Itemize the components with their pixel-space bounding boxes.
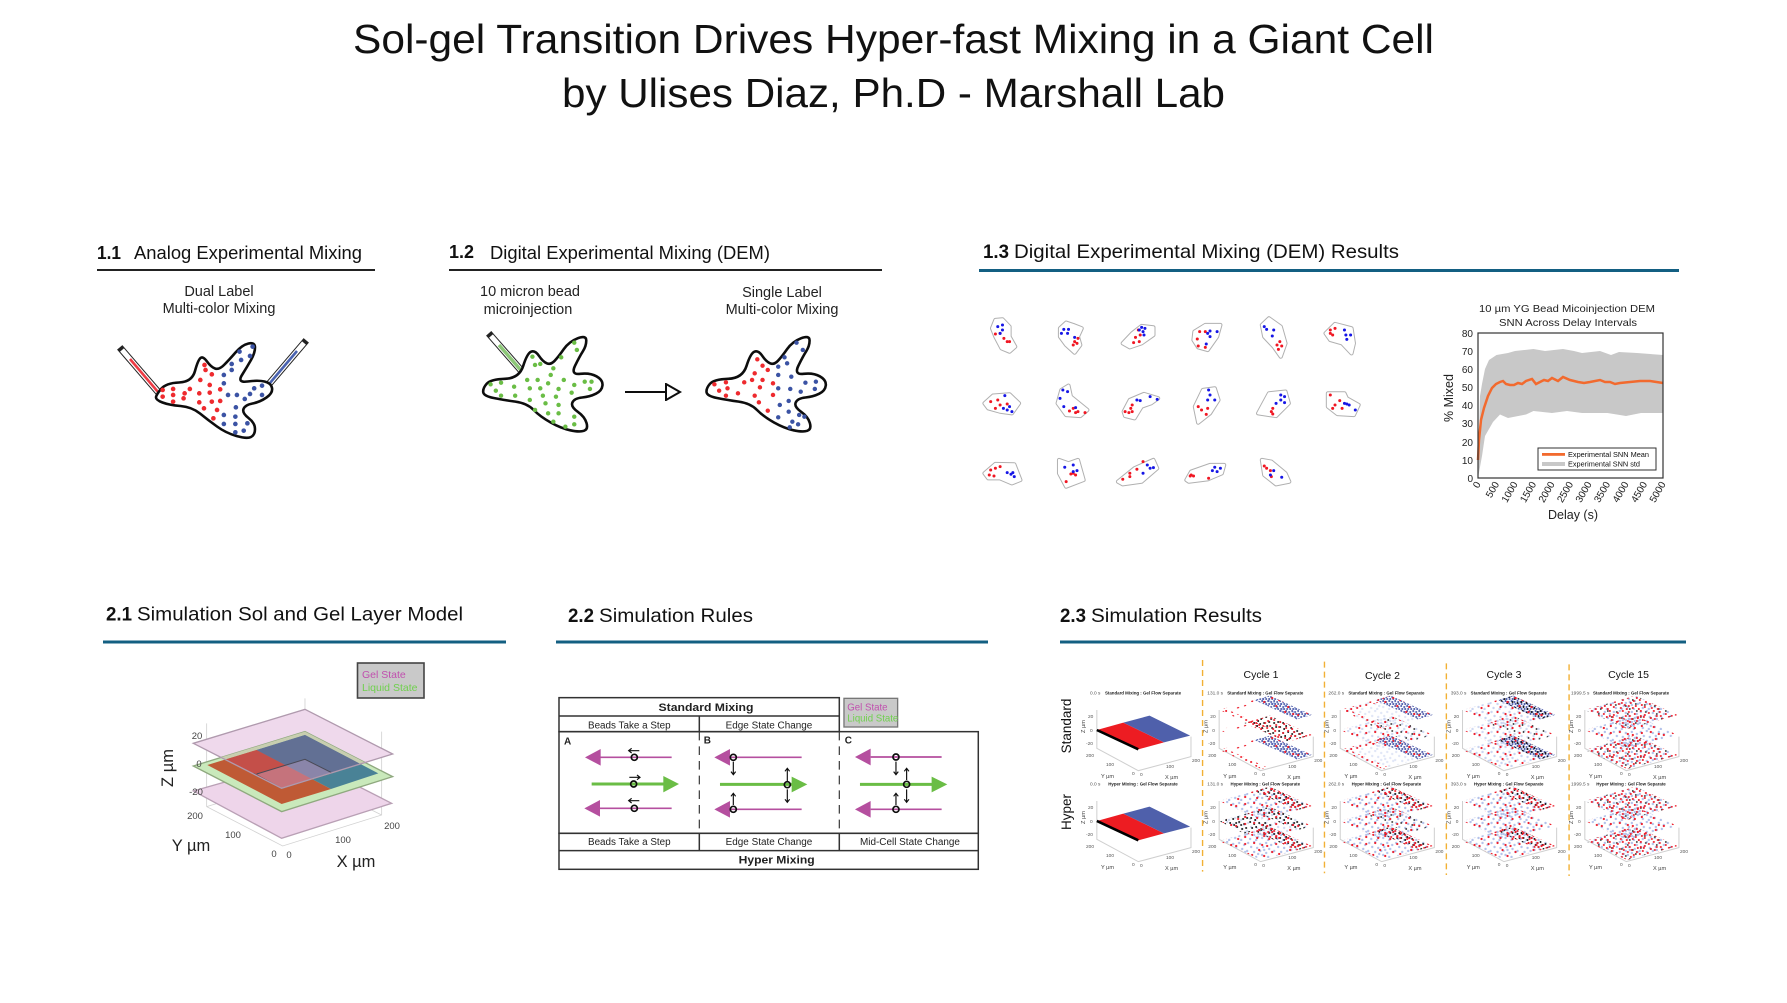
table labels: Hyper Mixing [739,855,815,867]
panel annotations: hyper row: 0 [1628,863,1631,869]
panel annotations: hyper row: 0 [1140,863,1143,869]
dashed cycle dividers [1203,660,1569,876]
panel annotations: standard row: X µm [1165,775,1179,781]
panel annotations: standard row: -20 [1329,741,1337,747]
text: single label multi-color mixing: Multi-color Mixing [726,302,838,318]
legend: Experimental SNN std [1568,460,1640,468]
axis tick labels [187,731,400,861]
chart: percent mixed across delay intervals [1442,303,1669,522]
panel annotations: hyper row: 200 [1192,849,1200,855]
panel annotations: hyper row: 0.0 s [1090,782,1101,788]
panel: 1.1 analog experimental mixing [97,242,375,438]
text: dual label multi-color mixing: Dual Label [184,284,254,300]
panel annotations: standard row: 100 [1472,762,1480,768]
panel annotations: standard row: 200 [1680,758,1688,764]
panel annotations: hyper row: 0 [1456,819,1459,825]
table labels: Edge State Change [726,720,813,731]
x axis labels: 1500 [1518,480,1539,505]
table labels: Standard Mixing [658,702,753,714]
panel annotations: standard row: 0 [1090,728,1093,734]
heading 2.3 [1060,605,1686,644]
cell tracks grid [985,318,1359,487]
y axis labels: 40 [1462,401,1473,412]
x axis labels: 4500 [1629,480,1650,505]
3D layer plot [159,698,400,871]
panel annotations: hyper row: 100 [1594,853,1602,859]
legend: gel and liquid state: Liquid State [362,682,418,694]
panel: standard cycle 15 [1585,696,1679,771]
panel annotations: standard row: -20 [1086,741,1093,747]
panel annotations: hyper row: 200 [1435,849,1444,855]
heading 1.3: Digital Experimental Mixing (DEM) Results [1014,241,1399,263]
axis tick labels: 0 [286,850,292,861]
x axis labels: 4000 [1611,480,1632,505]
panel annotations: hyper row: Hyper Mixing : Gel Flow Separate [1596,782,1666,786]
cycle labels: Cycle 15 [1608,669,1649,681]
panel annotations: standard row: Z µm [1569,720,1575,733]
legend: gel and liquid state: Liquid State [847,713,898,724]
panel annotations: standard row: 393.0 s [1451,690,1467,696]
panel annotations: standard row: 200 [1574,753,1582,759]
panel annotations: hyper row: 100 [1532,855,1540,861]
panel annotations: hyper row: -20 [1452,832,1459,838]
heading 1.1: Analog Experimental Mixing [134,242,362,263]
panel: hyper cycle 15 [1585,787,1679,862]
panel annotations: standard row: X µm [1287,775,1301,781]
panel annotations: standard row: 100 [1166,764,1174,770]
panel annotations: standard row: 0 [1132,771,1135,777]
text: dual label multi-color mixing: Multi-color Mixing [163,301,275,317]
panel annotations: hyper row: 1999.5 s [1571,782,1590,788]
panel annotations: standard row: 100 [1532,764,1540,770]
y axis labels: 20 [1462,438,1473,449]
axis tick labels: -20 [189,787,203,798]
axis tick labels: 100 [335,835,351,846]
panel annotations: hyper row: -20 [1086,832,1093,838]
panel: hyper initial [1097,801,1191,862]
panel annotations: standard row: Standard Mixing : Gel Flow Separate [1105,690,1182,696]
chart title: SNN Across Delay Intervals [1499,317,1637,329]
cycle labels: Cycle 3 [1486,669,1522,681]
panel annotations: standard row: 0 [1254,771,1257,777]
panel: hyper cycle 2 [1340,787,1434,862]
table labels: C [845,736,852,747]
panel annotations: standard row: Y µm [1344,774,1358,780]
heading 1.3: 1.3 [983,241,1009,263]
text: dual label multi-color mixing [163,284,275,317]
panel annotations: hyper row: 0 [1262,863,1265,869]
panel annotations: standard row: 0.0 s [1090,690,1101,696]
panel annotations: standard row: Standard Mixing : Gel Flow Separate [1227,690,1304,696]
panel annotations: standard row: 200 [1314,758,1323,764]
axis titles: Y µm [172,837,210,855]
panel annotations: standard row: -20 [1208,741,1216,747]
panel annotations: hyper row: Y µm [1589,865,1602,871]
x axis labels: 2500 [1555,480,1576,505]
axis tick labels: 0 [196,759,202,770]
row labels: Hyper [1059,793,1074,830]
panel annotations: hyper row: 200 [1329,844,1338,850]
legend: gel and liquid state [358,663,424,698]
panel annotations: hyper row: 20 [1454,805,1459,811]
panel annotations: hyper row: Y µm [1344,865,1358,871]
legend: Experimental SNN Mean [1568,450,1649,459]
axis titles [159,749,375,871]
panel annotations: standard row: 262.0 s [1328,690,1345,696]
panel annotations: standard row: 0 [1578,728,1581,734]
panel annotations: hyper row: 0 [1090,819,1093,825]
legend: gel and liquid state [844,698,898,727]
heading 1.2: Digital Experimental Mixing (DEM) [490,242,770,263]
panel annotations: standard row: 1999.5 s [1571,690,1590,696]
title [353,16,1434,116]
panel annotations: hyper row: 200 [1314,849,1323,855]
panel annotations: hyper row: 0 [1383,863,1386,869]
x axis labels: 500 [1484,480,1502,500]
table labels: A [564,736,571,747]
panel annotations: hyper row: 200 [1208,844,1217,850]
panel annotations: hyper row: 100 [1106,853,1114,859]
panel annotations: hyper row: Z µm [1081,811,1087,824]
axis titles: X µm [337,853,375,871]
panel annotations: hyper row: 0 [1212,819,1215,825]
y axis labels: 60 [1462,365,1473,376]
panel annotations: hyper row: Hyper Mixing : Gel Flow Separate [1108,782,1178,786]
panel: 2.2 simulation rules [556,605,988,869]
panel annotations: standard row: 200 [1208,753,1217,759]
panel annotations: hyper row: 20 [1576,805,1582,811]
x axis title: Delay (s) [1548,508,1598,522]
axis titles: Z µm [159,749,177,787]
chart title [1479,303,1655,329]
panel annotations: standard row: 200 [1192,758,1200,764]
panel annotations: hyper row: Y µm [1467,865,1480,871]
panel annotations: standard row: 100 [1409,764,1418,770]
y axis title: % Mixed [1442,374,1456,422]
title: by Ulises Diaz, Ph.D - Marshall Lab [562,70,1225,116]
heading 1.2: 1.2 [449,241,474,262]
y axis labels: 10 [1462,456,1473,467]
panel annotations: hyper row: 393.0 s [1451,782,1467,788]
heading 2.3: Simulation Results [1091,605,1262,627]
panel annotations: standard row: 100 [1654,764,1662,770]
panel annotations: hyper row: 200 [1086,844,1094,850]
text: 10 micron bead microinjection: 10 micron bead [480,284,580,300]
panel annotations: hyper row: Hyper Mixing : Gel Flow Separate [1352,782,1422,786]
panel annotations: hyper row: 100 [1228,853,1237,859]
y axis labels: 50 [1462,383,1473,394]
panel annotations: standard row: Z µm [1203,720,1209,733]
panel annotations: standard row: 20 [1088,714,1094,720]
panel annotations: standard row: 0 [1456,728,1459,734]
x axis labels: 3000 [1574,480,1595,505]
table labels: B [704,736,711,747]
panel annotations: standard row: Standard Mixing : Gel Flow Separate [1593,690,1670,696]
y axis labels: 70 [1462,347,1473,358]
panel annotations: standard row: 0 [1628,772,1631,778]
heading 2.1: Simulation Sol and Gel Layer Model [137,604,463,626]
panel annotations: hyper row: 100 [1409,855,1418,861]
panel annotations: hyper row: 0 [1333,819,1336,825]
text: 10 micron bead microinjection [480,284,580,318]
panel annotations: hyper row: -20 [1574,832,1581,838]
panel annotations: hyper row: 0 [1375,862,1378,868]
panel: 2.1 simulation sol and gel layer model [103,604,506,871]
arrows: column B edge state change [714,749,807,818]
panel annotations: standard row: X µm [1653,775,1667,781]
heading 2.2 [556,605,988,644]
panel annotations: standard row: 200 [1558,758,1566,764]
panel annotations: standard row: 100 [1349,762,1358,768]
panel annotations: hyper row: 20 [1331,805,1337,811]
panel annotations: hyper row: X µm [1408,866,1422,872]
row labels: Standard [1059,699,1074,753]
icon: green bead injected cell [483,336,603,431]
panel annotations: hyper row: X µm [1531,866,1544,872]
panel annotations: hyper row: Z µm [1324,811,1330,824]
row labels [1059,699,1074,830]
panel annotations: standard row: 100 [1106,762,1114,768]
text: single label multi-color mixing [726,285,838,318]
panel annotations: standard row: 0 [1506,772,1509,778]
axis tick labels: 200 [187,811,203,822]
panel annotations: standard row: 0 [1498,771,1501,777]
panel annotations: standard row: 0 [1212,728,1215,734]
panel annotations: hyper row: 200 [1452,844,1460,850]
panel annotations: standard row: 0 [1383,772,1386,778]
heading 2.3: 2.3 [1060,605,1086,627]
heading 2.2: 2.2 [568,605,594,627]
panel annotations: hyper row: 200 [1574,844,1582,850]
y axis labels: 80 [1462,329,1473,340]
panel annotations: standard row: 100 [1594,762,1602,768]
panel annotations: hyper row: X µm [1653,866,1667,872]
panel annotations: standard row: 20 [1576,714,1582,720]
axis tick labels: 100 [225,830,241,841]
panel annotations: hyper row: 0 [1578,819,1581,825]
panel annotations: hyper row: 100 [1349,853,1358,859]
text: single label multi-color mixing: Single Label [742,285,822,301]
title: Sol-gel Transition Drives Hyper-fast Mixing in a Giant Cell [353,16,1434,62]
heading 2.1: 2.1 [106,604,132,626]
panel annotations: hyper row: 200 [1680,849,1688,855]
panel annotations: hyper row: Z µm [1569,811,1575,824]
text: 10 micron bead microinjection: microinjection [484,302,572,318]
panel annotations: hyper row: 100 [1166,855,1174,861]
x axis labels: 0 [1471,480,1484,490]
panel: hyper cycle 1 [1219,787,1313,862]
axis tick labels: 0 [271,849,277,860]
panel annotations: standard row: 200 [1452,753,1460,759]
panel annotations: standard row: Y µm [1589,774,1602,780]
panel annotations: standard row: 0 [1262,772,1265,778]
heading 1.1: 1.1 [97,242,121,263]
panel annotations: hyper row: 20 [1088,805,1094,811]
panel annotations: standard row: 200 [1435,758,1444,764]
panel annotations: hyper row [1081,782,1688,872]
panel annotations: standard row: 100 [1228,762,1237,768]
panel annotations: standard row: Y µm [1467,774,1480,780]
panel annotations: standard row: X µm [1531,775,1544,781]
panel annotations: hyper row: Z µm [1203,811,1209,824]
panel annotations: hyper row: Y µm [1223,865,1237,871]
panel annotations: hyper row: 0 [1132,862,1135,868]
panel annotations: hyper row: 0 [1620,862,1623,868]
mean line [1478,377,1663,460]
panel annotations: standard row: Y µm [1223,774,1237,780]
table labels: Mid-Cell State Change [860,837,960,848]
panel annotations: hyper row: 200 [1558,849,1566,855]
panel annotations: standard row: 200 [1329,753,1338,759]
panel annotations: standard row: Y µm [1101,774,1114,780]
panel annotations: standard row: Z µm [1081,720,1087,733]
table labels: Beads Take a Step [588,837,671,848]
panel annotations: standard row: Standard Mixing : Gel Flow Separate [1471,690,1547,696]
legend [1538,448,1656,470]
panel annotations: hyper row: Z µm [1447,811,1453,824]
panel annotations: standard row: 20 [1331,714,1337,720]
panel: 1.3 DEM results [979,241,1679,522]
panel: 2.3 simulation results [1059,605,1688,876]
arrows: column A beads take a step [584,748,679,817]
table labels: Edge State Change [726,837,813,848]
panel annotations: hyper row: 0 [1506,863,1509,869]
panel annotations: hyper row: X µm [1165,866,1179,872]
panel annotations: standard row: Standard Mixing : Gel Flow Separate [1348,690,1425,696]
panel: hyper cycle 3 [1463,787,1557,862]
heading 1.2 [449,241,882,271]
table frame [559,698,978,869]
panel annotations: standard row: 0 [1375,771,1378,777]
y axis labels [1462,329,1473,485]
panel annotations: standard row: Z µm [1447,720,1453,733]
panel annotations: standard row: 100 [1288,764,1297,770]
x axis labels [1471,480,1669,505]
panel annotations: standard row: 131.0 s [1207,690,1224,696]
table labels: Beads Take a Step [588,720,671,731]
x axis labels: 3500 [1592,480,1613,505]
panel annotations: hyper row: -20 [1208,832,1216,838]
panel annotations: hyper row: 0 [1498,862,1501,868]
panel annotations: hyper row: 0 [1254,862,1257,868]
cycle labels: Cycle 1 [1243,669,1279,681]
simulation scatter panels [1081,660,1688,876]
panel annotations: standard row: 200 [1086,753,1094,759]
panel annotations: hyper row: 20 [1210,805,1216,811]
panel annotations: hyper row: X µm [1287,866,1301,872]
panel annotations: hyper row: 100 [1472,853,1480,859]
heading 2.2: Simulation Rules [599,605,753,627]
panel annotations: hyper row: Y µm [1101,865,1114,871]
panel annotations: standard row: Z µm [1324,720,1330,733]
heading 1.1 [97,242,375,271]
panel annotations: standard row: 0 [1333,728,1336,734]
axis tick labels: 200 [384,821,400,832]
arrows: column C mid-cell state change [855,749,947,818]
panel annotations: standard row: 0 [1620,771,1623,777]
panel: 1.2 digital experimental mixing [449,241,882,431]
x axis labels: 2000 [1537,480,1558,505]
panel: standard cycle 1 [1219,696,1313,771]
panel annotations: hyper row: 100 [1654,855,1662,861]
std band [1478,349,1663,478]
cycle labels: Cycle 2 [1365,670,1400,682]
x axis labels: 1000 [1500,480,1521,505]
y axis labels: 30 [1462,419,1473,430]
y axis labels: 0 [1467,474,1473,485]
panel annotations: standard row: 20 [1454,714,1459,720]
legend: gel and liquid state: Gel State [362,669,406,681]
chart title: 10 µm YG Bead Micoinjection DEM [1479,303,1655,315]
rules diagram [559,698,978,869]
panel annotations: hyper row: 262.0 s [1328,782,1345,788]
legend: gel and liquid state: Gel State [847,702,888,713]
panel annotations: hyper row: 100 [1288,855,1297,861]
heading 1.3 [979,241,1679,272]
panel annotations: standard row: -20 [1574,741,1581,747]
cycle labels [1243,669,1649,682]
panel annotations: standard row [1081,690,1688,781]
panel annotations: standard row: 20 [1210,714,1216,720]
panel: standard initial [1097,710,1191,771]
panel annotations: standard row: -20 [1452,741,1459,747]
panel annotations: standard row: 0 [1140,772,1143,778]
panel: standard cycle 2 [1340,696,1434,771]
panel: standard cycle 3 [1463,696,1557,771]
panel annotations: hyper row: Hyper Mixing : Gel Flow Separate [1231,782,1301,786]
x axis labels: 5000 [1648,480,1669,505]
panel annotations: hyper row: -20 [1329,832,1337,838]
heading 2.1 [103,604,506,644]
panel annotations: hyper row: Hyper Mixing : Gel Flow Separate [1474,782,1544,786]
arrow: green cell to mixed cell [625,384,680,400]
axis tick labels: 20 [192,731,202,742]
icon: single label mixed cell [706,337,826,431]
table labels [564,702,960,867]
icon: dual label cell with two pipettes [122,343,304,438]
panel annotations: hyper row: 131.0 s [1207,782,1224,788]
panel annotations: standard row: X µm [1408,775,1422,781]
